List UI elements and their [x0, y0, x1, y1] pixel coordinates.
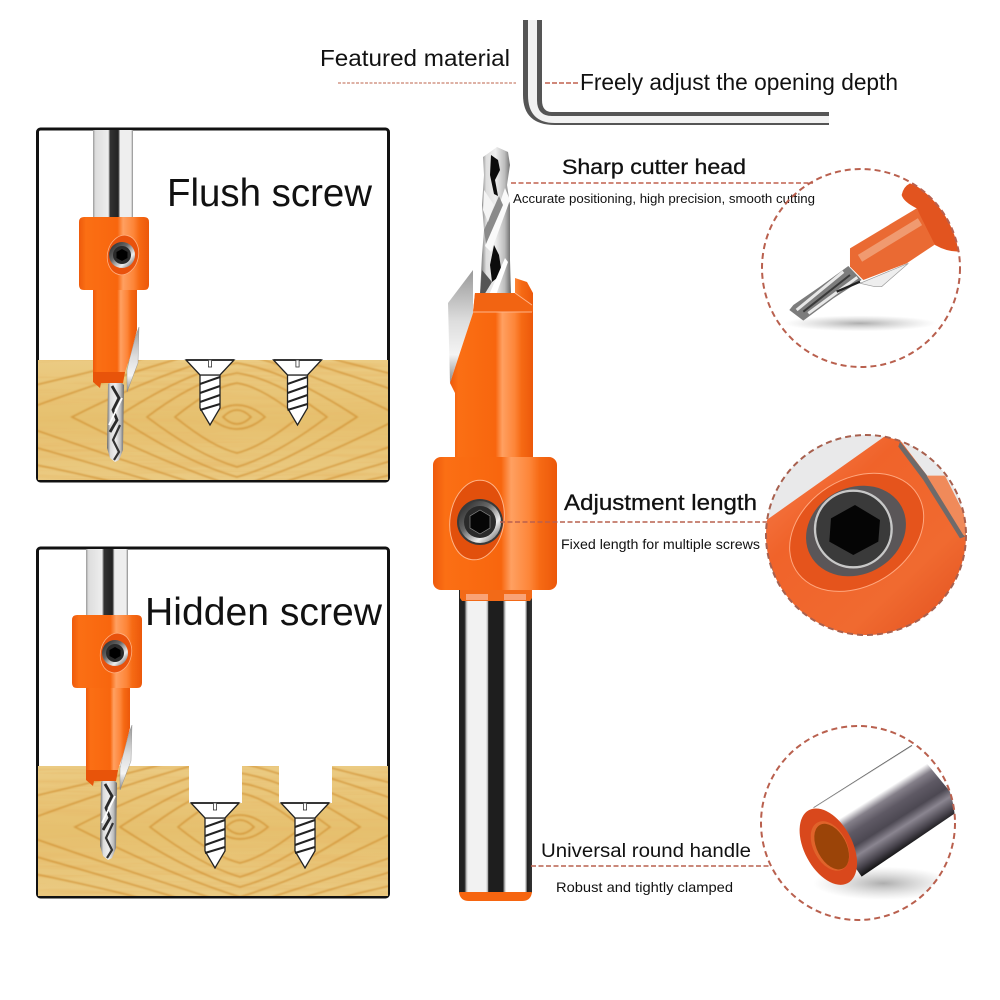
twist drill tip — [480, 147, 511, 295]
set screw — [457, 499, 503, 545]
tool body — [450, 278, 533, 457]
round shank — [459, 590, 532, 893]
drill bit — [72, 615, 142, 860]
heading: freely adjust the opening depth: Freely adjust the opening depth — [580, 69, 898, 95]
callout: adjustment length — [500, 425, 980, 642]
collar — [433, 457, 557, 590]
body top chamfer — [473, 293, 533, 312]
callout: universal round handle — [531, 726, 963, 920]
icon: hex key — [523, 20, 829, 125]
callout heading: Adjustment length — [564, 490, 757, 515]
screw: flush right — [274, 360, 322, 425]
panel frame — [38, 548, 388, 897]
wood block with notches — [38, 766, 388, 896]
chamfer edge highlight — [473, 293, 532, 312]
leader line — [500, 521, 767, 523]
panel: flush screw — [36, 128, 390, 482]
callout description: Robust and tightly clamped — [556, 879, 733, 895]
panel frame — [38, 129, 388, 481]
leader line: opening depth — [545, 82, 580, 84]
shank top band — [460, 590, 532, 601]
screw: hidden left — [191, 803, 239, 868]
detail circle — [765, 434, 967, 636]
screw: hidden right — [281, 803, 329, 868]
main drill bit — [433, 147, 557, 901]
drill shank — [86, 549, 128, 617]
panel: hidden screw — [36, 546, 390, 898]
detail circle — [761, 726, 963, 920]
callout description: Fixed length for multiple screws — [561, 537, 760, 552]
detail circle — [762, 169, 960, 367]
callout: sharp cutter head — [511, 156, 960, 367]
screw recess — [445, 477, 509, 563]
shank end cap — [459, 892, 532, 901]
panel title: Flush screw — [167, 172, 373, 215]
callout heading: Sharp cutter head — [562, 156, 746, 179]
leader line — [511, 182, 813, 184]
panel title: Hidden screw — [145, 591, 383, 634]
screw: flush left — [186, 360, 234, 425]
leader line: featured material — [338, 82, 516, 84]
drill shank — [93, 130, 133, 218]
callout description: Accurate positioning, high precision, smooth cutting — [513, 191, 815, 206]
leader line — [531, 865, 770, 867]
callout heading: Universal round handle — [541, 841, 751, 862]
heading: featured material: Featured material — [320, 45, 510, 71]
wood block — [38, 360, 388, 480]
drill bit — [79, 217, 149, 462]
cutter blade — [448, 270, 473, 383]
